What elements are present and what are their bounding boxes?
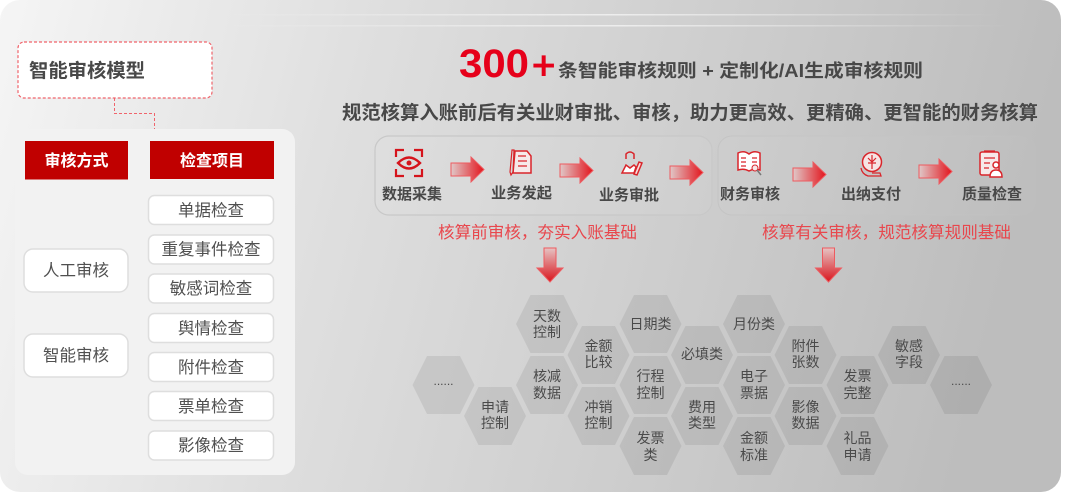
item: 影像检查 (148, 431, 274, 460)
hexagon: 申请控制: 申请 (481, 399, 509, 415)
hexagon: 冲销控制: 冲销 (584, 399, 612, 415)
method: 人工审核: 人工审核 (43, 261, 109, 280)
headline: 300+ rules: 300 (459, 42, 529, 86)
hexagon: 敏感字段: 敏感 (895, 338, 923, 354)
item: 影像检查: 影像检查 (178, 436, 244, 455)
hexagon: 金额比较: 金额 (584, 338, 612, 354)
header: 审核方式: 审核方式 (44, 151, 109, 170)
hexagon: 金额标准: 金额 (740, 430, 768, 446)
hexagon: 天数控制: 控制 (533, 324, 561, 340)
step: 业务发起: 业务发起 (491, 184, 552, 202)
heading box: 智能审核模型 (18, 42, 212, 98)
step: 财务审核 (720, 152, 780, 203)
method: 智能审核: 智能审核 (43, 346, 109, 365)
hexagon: 影像数据 (774, 387, 836, 445)
hexagon: 行程控制: 行程 (636, 368, 664, 384)
step: 出纳支付 (841, 152, 901, 203)
hexagon: more left: ...... (433, 374, 454, 388)
arrow (560, 158, 593, 183)
icon: reviewer with pen (622, 152, 642, 175)
icon: eye scan (396, 150, 422, 176)
heading box: 智能审核模型: 智能审核模型 (29, 59, 145, 82)
hexagon: 金额比较: 比较 (584, 354, 612, 370)
hexagon: 冲销控制 (568, 387, 630, 445)
method: 智能审核 (24, 334, 128, 377)
item: 重复事件检查 (148, 235, 274, 264)
step: 业务发起 (491, 150, 552, 202)
hexagon: 影像数据: 影像 (792, 399, 820, 415)
caption: pre-accounting: 核算前审核，夯实入账基础 (438, 223, 637, 242)
item: 附件检查 (148, 352, 274, 382)
hexagon: 费用类型: 费用 (688, 399, 716, 415)
icon: document and pen (510, 150, 531, 175)
hexagon: 月份类 (723, 295, 785, 353)
arrow: down left (537, 248, 563, 282)
item: 票单检查 (148, 392, 274, 420)
step: 质量检查: 质量检查 (962, 185, 1022, 203)
hexagon: 发票类: 发票 (636, 430, 664, 446)
step: 业务审批 (599, 152, 659, 204)
arrow: down right (816, 248, 842, 282)
hexagon: 发票完整 (826, 356, 888, 414)
hexagon: 金额比较 (568, 326, 630, 384)
hexagon: 礼品申请: 礼品 (844, 430, 872, 446)
hexagon: 发票类: 类 (644, 447, 658, 463)
hexagon: 金额标准: 标准 (740, 447, 768, 463)
icon: clipboard and person (980, 151, 1002, 177)
arrow (451, 157, 484, 182)
headline: 300+ rules: + (532, 44, 555, 88)
arrow (670, 160, 703, 185)
hexagon: 月份类: 月份类 (733, 316, 775, 332)
step: 质量检查 (962, 151, 1022, 203)
icon: open book and magnifier (738, 152, 761, 175)
header: 检查项目 (150, 141, 274, 179)
hexagon cluster (412, 295, 992, 475)
step: 财务审核: 财务审核 (720, 185, 780, 203)
hexagon: 电子票据 (723, 356, 785, 414)
hexagon: 核减数据: 数据 (533, 385, 561, 401)
hexagon: more left (412, 356, 474, 414)
item: 票单检查: 票单检查 (178, 397, 244, 416)
hexagon: more right: ...... (951, 374, 971, 388)
header: 检查项目: 检查项目 (180, 151, 244, 170)
hexagon: 礼品申请: 申请 (844, 447, 872, 463)
hexagon: 附件张数: 附件 (792, 338, 820, 354)
caption: accounting: 核算有关审核，规范核算规则基础 (762, 223, 1011, 242)
dashed connector (114, 98, 154, 130)
hexagon: 申请控制 (464, 387, 526, 445)
hexagon: 核减数据 (516, 356, 578, 414)
item: 重复事件检查: 重复事件检查 (162, 240, 260, 259)
hexagon: 发票完整: 发票 (844, 368, 872, 384)
hexagon: 行程控制: 控制 (636, 385, 664, 401)
hexagon: 金额标准 (723, 417, 785, 475)
icon: hand holding coin (861, 152, 882, 176)
panel: accounting process (718, 136, 1036, 215)
arrow (919, 159, 952, 184)
hexagon: 必填类 (671, 326, 733, 384)
hexagon: 行程控制 (620, 356, 682, 414)
hexagon: 费用类型 (671, 387, 733, 445)
hexagon: 附件张数: 张数 (792, 354, 820, 370)
hexagon: 电子票据: 电子 (740, 368, 768, 384)
step: 数据采集: 数据采集 (382, 185, 442, 203)
hexagon: 天数控制 (516, 295, 578, 353)
hexagon: 发票完整: 完整 (844, 385, 872, 401)
hexagon: 礼品申请 (826, 417, 888, 475)
step: 业务审批: 业务审批 (599, 186, 659, 204)
item: 单据检查 (148, 196, 274, 224)
headline: 300+ rules (459, 42, 923, 88)
method: 人工审核 (24, 249, 128, 292)
item: 敏感词检查 (148, 274, 274, 303)
hexagon: 核减数据: 核减 (533, 368, 561, 384)
item: 敏感词检查: 敏感词检查 (170, 279, 252, 298)
hexagon: 申请控制: 控制 (481, 415, 509, 431)
hexagon: 敏感字段: 字段 (895, 354, 923, 370)
hexagon: 日期类: 日期类 (630, 316, 672, 332)
hexagon: more right (930, 356, 992, 414)
hexagon: 影像数据: 数据 (792, 415, 820, 431)
item: 附件检查: 附件检查 (178, 358, 244, 377)
item: 单据检查: 单据检查 (178, 201, 244, 220)
subheading: 规范核算入账前后有关业财审批、审核，助力更高效、更精确、更智能的财务核算 (342, 101, 1038, 124)
panel: audit model table (15, 129, 295, 475)
decorative top lines (220, 14, 1010, 26)
hexagon: 冲销控制: 控制 (584, 415, 612, 431)
hexagon: 费用类型: 类型 (688, 415, 716, 431)
step: 出纳支付: 出纳支付 (841, 185, 901, 203)
hexagon: 天数控制: 天数 (533, 308, 561, 324)
hexagon: 电子票据: 票据 (740, 385, 768, 401)
step: 数据采集 (382, 150, 442, 203)
hexagon: 敏感字段 (878, 326, 940, 384)
item: 舆情检查 (148, 314, 274, 342)
panel: pre-accounting process (375, 136, 712, 215)
headline: 300+ rules: 条智能审核规则 + 定制化/AI生成审核规则 (558, 60, 923, 81)
arrow (793, 162, 826, 187)
header: 审核方式 (25, 141, 128, 180)
hexagon: 必填类: 必填类 (681, 346, 723, 362)
hexagon: 日期类 (620, 295, 682, 353)
item: 舆情检查: 舆情检查 (178, 319, 244, 338)
hexagon: 发票类 (620, 417, 682, 475)
hexagon: 附件张数 (774, 326, 836, 384)
